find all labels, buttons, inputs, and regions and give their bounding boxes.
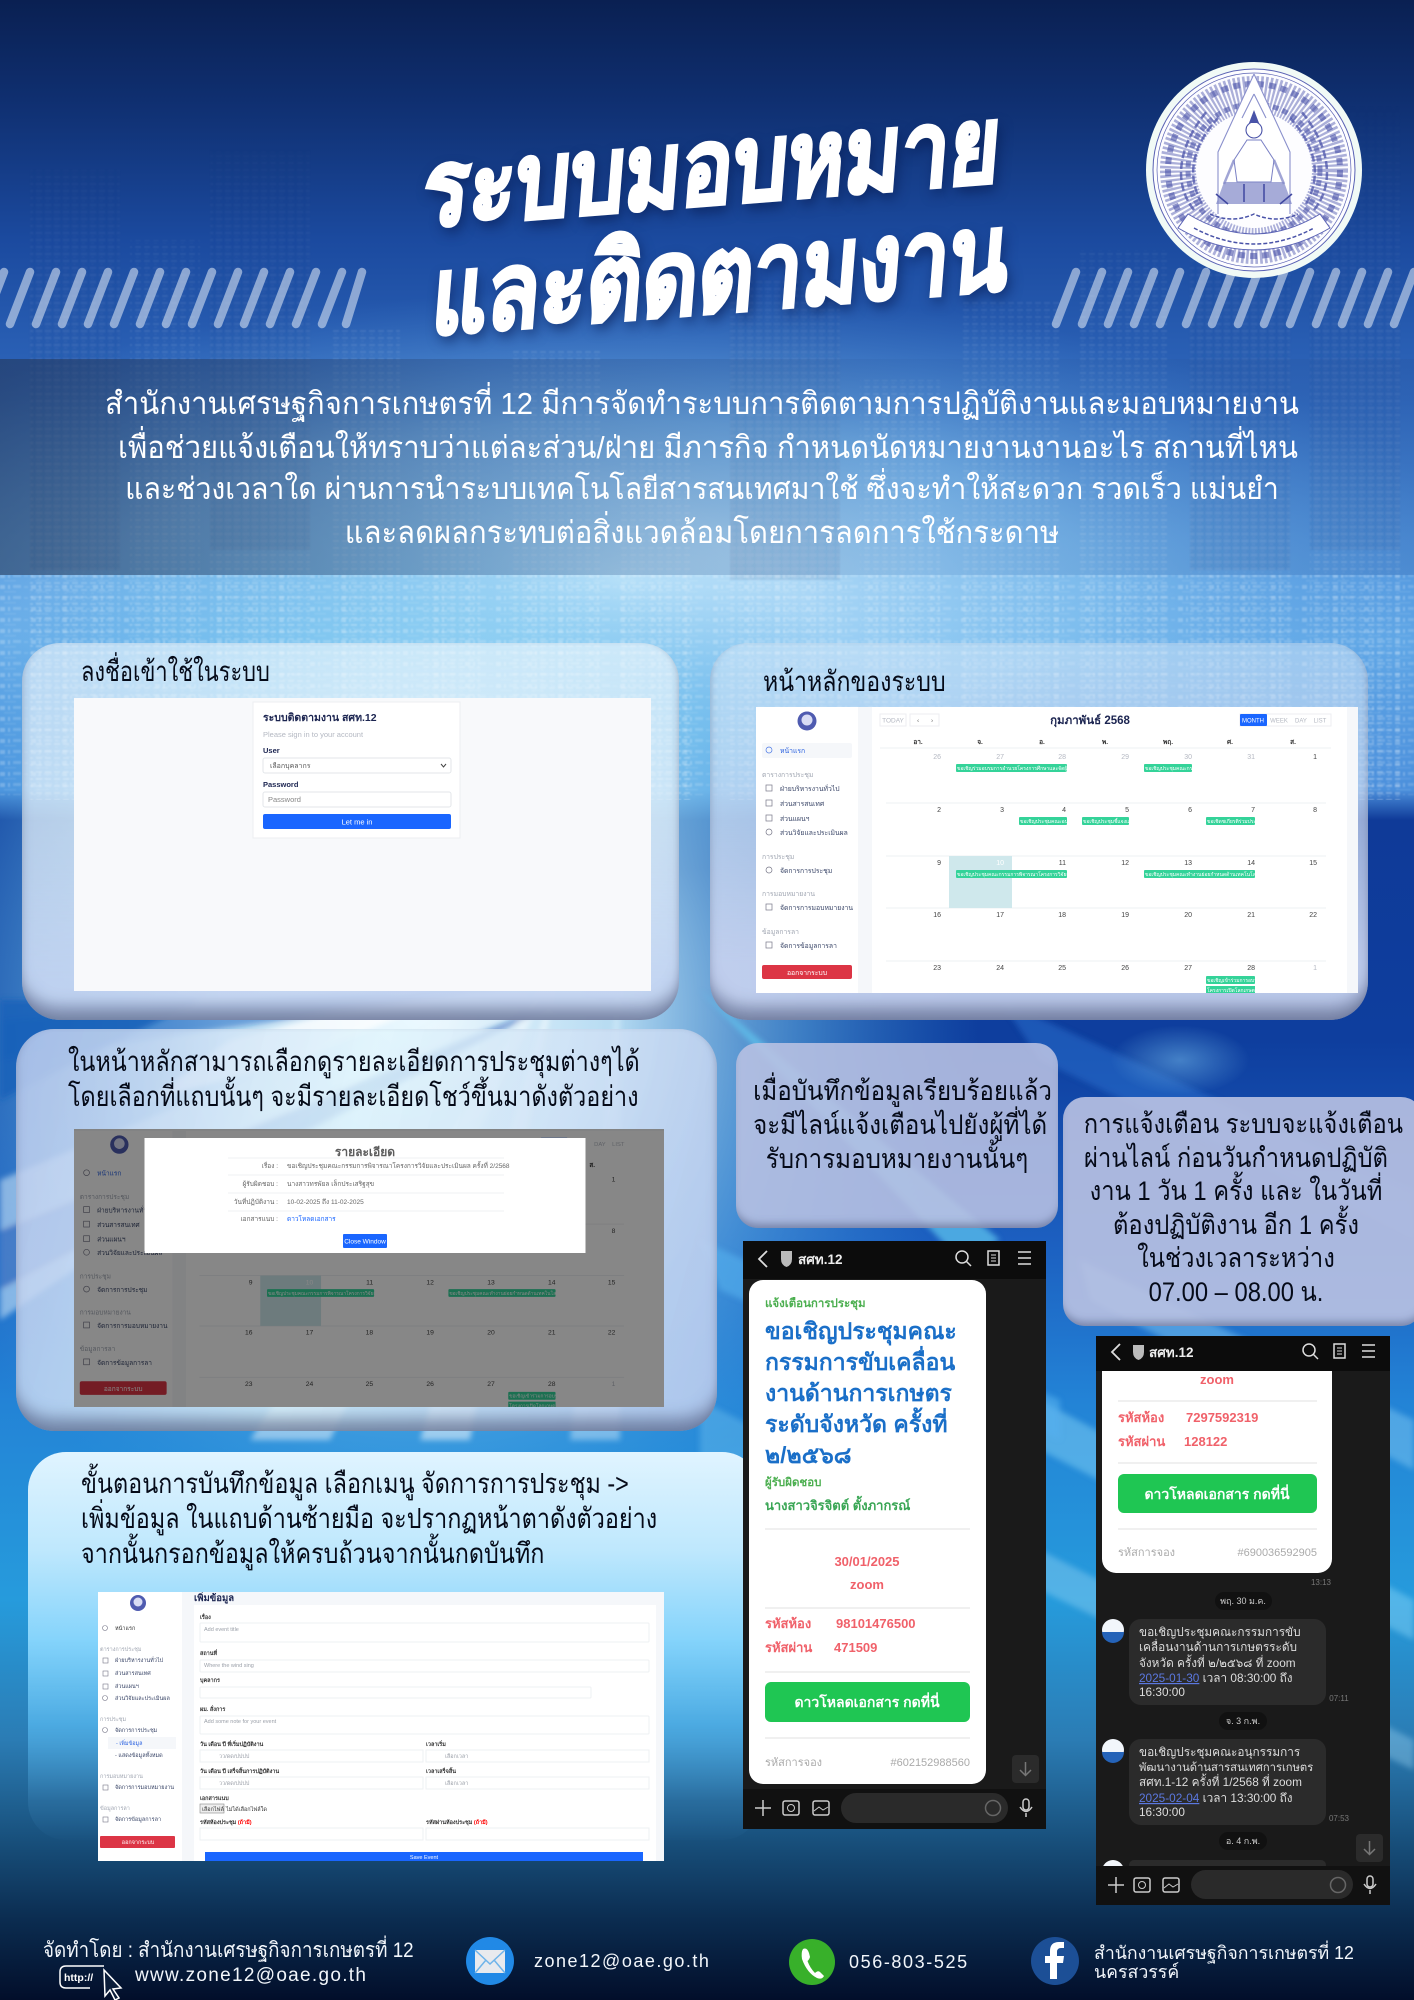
screenshot: calendar: ขอเชิญประชุมคณะอนุกร [1020,818,1074,825]
screenshot: calendar: พ. [1102,739,1108,746]
sidebar: จัดการข้อมูลการลา [780,942,837,950]
sidebar: จัดการการประชุม [115,1727,158,1734]
screenshot: details modal: LIST [612,1142,625,1148]
screenshot: details modal: หน้าแรก [97,1170,121,1178]
date pill [1219,1832,1267,1850]
day numbers: 22 [1309,912,1317,919]
message card [749,1280,986,1784]
screenshot: calendar: ขอเชิญเข้าร่วมการอบรม [1207,977,1260,984]
day numbers: 9 [937,860,941,867]
form: เพิ่มข้อมูล [194,1592,234,1605]
day numbers: 7 [1251,807,1255,814]
form: เลือกเวลา [445,1753,468,1760]
screenshot: details modal: 8 [612,1228,616,1235]
calendar header: LIST [1314,718,1327,724]
sidebar: การประชุม [762,854,794,861]
date pill [1219,1712,1267,1730]
form: บุคลากร [200,1677,220,1684]
screenshot: login page: เลือกบุคลากร [270,762,311,770]
heading: meeting details: โดยเลือกที่แถบนั้นๆ จะมีรายละเอียดโชว์ขึ้นมาดังตัวอย่าง [68,1081,639,1112]
text: reminder schedule note: งาน 1 วัน 1 ครั้ง และ ในวันที่ [1090,1176,1382,1206]
screenshot: details modal: 11 [366,1279,373,1286]
sidebar: หน้าแรก [780,747,805,755]
message card: zoom [1200,1372,1234,1387]
phone header [1096,1336,1390,1371]
screenshot: details modal: 20 [487,1330,495,1337]
form: ไม่ได้เลือกไฟล์ใด [225,1806,267,1813]
form: วัน เดือน ปี เสร็จสิ้นการปฏิบัติงาน [200,1766,279,1775]
form: รหัสห้องประชุม (ถ้ามี) [200,1818,252,1826]
screenshot: calendar: ขอเชิญร่วมอบรมการอำนวยโครงการศึกษาและจัดผู้ปฏิบัติการ [957,765,1089,772]
modal: event details: ดาวโหลดเอกสาร [287,1215,336,1223]
day numbers: 1 [1313,965,1317,972]
diagonal stripes right [1052,268,1414,328]
sidebar: จัดการการมอบหมายงาน [115,1784,174,1791]
avatar [1102,1739,1124,1763]
screenshot: details modal: ส่วนสารสนเทศ [97,1222,140,1229]
screenshot: details modal: ขอเชิญเข้าร่วมการอบรม [509,1393,560,1400]
form: วัน เดือน ปี ที่เริ่มปฏิบัติงาน [200,1740,264,1748]
message card: 98101476500 [836,1616,916,1631]
panel: sign in [22,643,679,1020]
modal: event details: เรื่อง : [262,1161,278,1170]
day numbers: 13 [1184,860,1192,867]
day numbers: 10 [996,860,1004,867]
form: เลือกเวลา [445,1780,468,1787]
text: reminder schedule note [1084,1109,1403,1306]
heading: meeting details [68,1046,640,1112]
chat bubble 1: 2025-01-30 เวลา 08:30:00 ถึง [1139,1671,1293,1685]
icon: phone [789,1939,835,1985]
icon: web address cursor: http:// [64,1972,93,1984]
date pill: จ. 3 ก.พ. [1226,1716,1260,1726]
form: สถานที่ [200,1649,218,1657]
screenshot: calendar: ขอเชิดชเกียรติร่วมประ [1207,818,1256,825]
panel: LINE notification note [736,1043,1058,1228]
message card: 471509 [834,1640,877,1655]
screenshot: details modal: 17 [306,1330,314,1337]
screenshot: login page: Let me in [342,818,372,826]
screenshot: details modal: 10 [306,1279,314,1286]
day numbers: 14 [1247,860,1255,867]
message card: 7297592319 [1186,1410,1258,1425]
message card: ระดับจังหวัด ครั้งที่ [765,1407,947,1437]
screenshot: details modal: 16 [245,1330,253,1337]
form: เรื่อง [200,1613,211,1621]
message card [1102,1371,1332,1573]
day numbers: 28 [1058,754,1066,761]
message card: รหัสห้อง [1118,1410,1164,1425]
screenshot: login page: User [263,746,280,755]
phone input bar [743,1789,1046,1829]
screenshot: calendar: ส. [1290,739,1296,746]
sidebar: ออกจากระบบ [787,970,827,977]
modal: event details: ผู้รับผิดชอบ : [242,1180,278,1188]
message card: ๒/๒๕๖๘ [765,1442,851,1468]
panel: how to save data [28,1452,760,1840]
day numbers: 23 [933,965,941,972]
day numbers: 27 [996,754,1004,761]
form: เวลาเริ่ม [426,1740,446,1748]
sidebar [100,1595,176,1848]
form [194,1590,656,1861]
intro text block [105,382,1299,550]
form: รหัสผ่านห้องประชุม (ถ้ามี) [426,1818,488,1826]
day numbers: 20 [1184,912,1192,919]
screenshot: login page [74,698,651,991]
sidebar: หน้าแรก [115,1625,135,1632]
chat bubble 2: 07:53 [1329,1814,1350,1823]
phone header: สศท.12 [798,1252,842,1267]
day numbers: 6 [1188,807,1192,814]
screenshot: details modal: จัดการข้อมูลการลา [97,1359,152,1367]
chat bubble 2: สศท.1-12 ครั้งที่ 1/2568 ที่ zoom [1139,1773,1302,1789]
screenshot: details modal: 1 [612,1381,616,1388]
form: Where the wind sing [204,1663,254,1669]
message card: ดาวโหลดเอกสาร กดที่นี่ [1144,1484,1290,1502]
message card: นางสาวจิรจิตต์ ตั้งภากรณ์ [765,1495,910,1513]
heading: how to save data [81,1464,657,1570]
message card: zoom [850,1577,884,1592]
message card: 30/01/2025 [834,1554,900,1569]
chat bubble 1: เคลื่อนงานด้านการเกษตรระดับ [1139,1639,1297,1654]
text: reminder schedule note: ต้องปฏิบัติงาน อีก 1 ครั้ง [1113,1210,1359,1240]
form: Add some note for your event [204,1719,277,1725]
modal: event details: รายละเอียด [335,1145,395,1159]
screenshot: details modal: ฝ่ายบริหารงานทั่วไป [97,1205,154,1214]
modal: event details: เอกสารแนบ : [240,1216,278,1223]
day numbers: 11 [1059,860,1066,867]
icon: email [466,1937,514,1985]
heading: main page: หน้าหลักของระบบ [763,666,946,697]
screenshot: login page: ระบบติดตามงาน สศท.12 [263,712,377,724]
sidebar [762,712,853,979]
message card: ขอเชิญประชุมคณะ [765,1318,957,1346]
screenshot: details modal: 15 [608,1279,616,1286]
chat bubble 1: ขอเชิญประชุมคณะกรรมการขับ [1139,1625,1301,1639]
screenshot: calendar: ขอเชิญประชุมชี้แจงแผน [1083,816,1136,825]
phone screenshot: LINE reminders: 13:13 [1311,1578,1332,1587]
screenshot: details modal: 1 [612,1176,616,1183]
screenshot: details modal: 25 [366,1381,373,1388]
screenshot: details modal: ส. [589,1162,595,1169]
calendar header [880,713,1331,728]
chat bubble 2: 16:30:00 [1139,1805,1185,1819]
sidebar: การมอบหมายงาน [100,1774,143,1780]
heading: how to save data: เพิ่มข้อมูล ในแถบด้านซ้ายมือ จะปรากฏหน้าตาดังตัวอย่าง [81,1503,657,1534]
screenshot: details modal: 13 [487,1279,495,1286]
phone screenshot: LINE reminders [1096,1336,1390,1905]
sidebar: ส่วนแผนฯ [115,1683,139,1690]
message card: รหัสผ่าน [1118,1434,1165,1449]
form: Add event title [204,1627,239,1633]
phone input bar [1096,1866,1390,1905]
decorative band behind the intro text [0,359,1414,575]
message card: งานด้านการเกษตร [765,1380,953,1406]
chat bubble 1 [1129,1619,1349,1705]
day numbers: 25 [1058,965,1066,972]
date pill: อ. 4 ก.พ. [1226,1836,1260,1846]
screenshot: details modal: 27 [487,1381,495,1388]
day numbers: 26 [1121,965,1129,972]
screenshot: login page: Password [263,780,299,789]
screenshot: calendar: จ. [977,739,983,746]
calendar header: WEEK [1270,718,1288,724]
message card: รหัสผ่าน [765,1640,812,1655]
events [956,764,1255,993]
footer: producer [43,1936,414,2000]
screenshot: details modal: การมอบหมายงาน [80,1309,131,1316]
calendar header: DAY [1295,718,1307,724]
sidebar: ส่วนแผนฯ [780,816,810,823]
sidebar: ตารางการประชุม [762,772,813,779]
diagonal stripes left [0,268,366,328]
sidebar: - เพิ่มข้อมูล [116,1739,143,1747]
footer: facebook: สำนักงานเศรษฐกิจการเกษตรที่ 12 [1094,1943,1354,1963]
day numbers: 19 [1121,912,1129,919]
message card: กรรมการขับเคลื่อน [765,1345,955,1375]
screenshot: details modal: ขอเชิญประชุมคณะทำงานย่อยกำหนดด้านเทคโนโลยีสาร [449,1290,568,1297]
screenshot: add data form [98,1592,664,1861]
chat bubble 2 [1129,1739,1350,1825]
footer: facebook: นครสวรรค์ [1094,1962,1179,1982]
intro text block: เพื่อช่วยแจ้งเตือนให้ทราบว่าแต่ละส่วน/ฝ่าย มีภารกิจ กำหนดนัดหมายงานงานอะไร สถานที่ไหน [118,430,1298,465]
footer: facebook [1031,1937,1354,1985]
screenshot: calendar [756,707,1358,993]
footer: producer: www.zone12@oae.go.th [135,1965,367,1986]
footer: phone [789,1939,969,1985]
form: วว/ดด/ปปปป [219,1780,250,1787]
screenshot: details modal: 22 [608,1330,616,1337]
title: และติดตามงาน [428,193,1013,358]
day numbers: 16 [933,912,941,919]
chat bubble 1: 16:30:00 [1139,1685,1185,1699]
sidebar: ข้อมูลการลา [762,928,799,936]
modal: event details [144,1138,586,1253]
day numbers: 28 [1247,965,1255,972]
day numbers: 31 [1247,754,1255,761]
screenshot: calendar: ขอเชิญประชุมคณะกรรม [1145,765,1198,772]
logo seal: Office of Agricultural Economics [1146,62,1362,278]
screenshot: calendar: ศ. [1227,739,1233,746]
avatar [1102,1619,1124,1643]
heading: sign in: ลงชื่อเข้าใช้ในระบบ [81,656,270,687]
screenshot: details modal: ตารางการประชุม [80,1194,129,1201]
panel: main page [710,643,1368,1020]
sidebar: ออกจากระบบ [122,1840,155,1846]
screenshot: calendar: อ. [1039,739,1045,746]
screenshot: details modal: ข้อมูลการลา [80,1345,116,1353]
text: reminder schedule note: การแจ้งเตือน ระบบจะแจ้งเตือน [1084,1109,1403,1139]
sidebar: ส่วนสารสนเทศ [780,801,825,808]
screenshot: details modal: 19 [426,1330,434,1337]
form: เอกสารแนบ [200,1795,229,1802]
sidebar: ข้อมูลการลา [100,1805,130,1812]
chat bubble 2: 2025-02-04 เวลา 13:30:00 ถึง [1139,1791,1293,1805]
day numbers: 21 [1247,912,1255,919]
footer: phone: 056-803-525 [849,1952,969,1972]
calendar header: TODAY [882,718,905,724]
day numbers: 8 [1313,807,1317,814]
sidebar: ตารางการประชุม [100,1646,142,1653]
date pill: พฤ. 30 ม.ค. [1220,1596,1266,1606]
screenshot: calendar: ขอเชิญประชุมคณะกรรมการพิจารณาโครงการวิจัยและประ [957,871,1084,878]
calendar header: › [931,718,933,724]
sidebar: การมอบหมายงาน [762,891,815,898]
title: ระบบมอบหมาย [419,85,1005,250]
calendar header: MONTH [1242,718,1264,724]
title [419,85,1016,358]
screenshot: calendar: พฤ. [1163,739,1173,746]
message card: รหัสการจอง [765,1757,822,1769]
screenshot: login page: Please sign in to your account [263,730,364,739]
day numbers: 29 [1121,754,1129,761]
form: เวลาเสร็จสิ้น [426,1766,456,1775]
day numbers: 27 [1184,965,1192,972]
text: reminder schedule note: ในช่วงเวลาระหว่าง [1137,1243,1335,1273]
screenshot: details modal: การประชุม [80,1273,111,1280]
intro text block: สำนักงานเศรษฐกิจการเกษตรที่ 12 มีการจัดทำระบบการติดตามการปฏิบัติงานและมอบหมายงาน [105,386,1299,421]
sidebar: จัดการการมอบหมายงาน [780,904,853,912]
day numbers: 1 [1313,754,1317,761]
footer: email [466,1937,710,1985]
footer: producer: จัดทำโดย : สำนักงานเศรษฐกิจการเกษตรที่ 12 [43,1939,414,1962]
calendar header: ‹ [917,718,919,724]
screenshot: details modal: ส่วนวิจัยและประเมินผล [97,1249,162,1257]
screenshot: details modal: 9 [249,1279,253,1286]
sidebar: - แสดงข้อมูลทั้งหมด [115,1751,163,1759]
chat bubble 2: พัฒนางานด้านสารสนเทศการเกษตร [1139,1761,1313,1774]
screenshot: details modal: 23 [245,1381,253,1388]
screenshot: details modal: ส่วนแผนฯ [97,1237,126,1244]
message card: รหัสห้อง [765,1616,811,1631]
screenshot: calendar: อา. [913,739,923,746]
screenshot: login page: Password [268,795,301,804]
phone header: สศท.12 [1149,1345,1193,1360]
screenshot: details modal: 18 [366,1330,373,1337]
screenshot: details modal: จัดการการมอบหมายงาน [97,1322,168,1330]
day numbers: 2 [937,807,941,814]
heading: how to save data: จากนั้นกรอกข้อมูลให้ครบถ้วนจากนั้นกดบันทึก [81,1538,544,1569]
panel: reminder schedule note [1063,1097,1414,1326]
form: วว/ดด/ปปปป [219,1753,250,1760]
modal: event details: วันที่ปฏิบัติงาน : [234,1197,278,1206]
day numbers [933,754,1317,972]
text: LINE notification note: เมื่อบันทึกข้อมูลเรียบร้อยแล้ว [753,1076,1052,1106]
text: reminder schedule note: 07.00 – 08.00 น. [1149,1276,1323,1306]
day numbers: 12 [1121,860,1129,867]
sidebar: ส่วนสารสนเทศ [115,1670,151,1677]
screenshot: details modal: 21 [548,1330,556,1337]
message card: แจ้งเตือนการประชุม [765,1297,866,1311]
chat bubble 2: ขอเชิญประชุมคณะอนุกรรมการ [1139,1745,1300,1759]
message card: #602152988560 [890,1757,970,1769]
screenshot: calendar: ขอเชิญประชุมคณะทำงานย่อยกำหนดด้านเทคโนโลยีสาร [1145,871,1268,878]
message card: 128122 [1184,1434,1227,1449]
text: LINE notification note: รับการมอบหมายงานนั้นๆ [766,1144,1028,1174]
day numbers: 18 [1058,912,1066,919]
screenshot: details modal: 24 [306,1381,314,1388]
heading: meeting details: ในหน้าหลักสามารถเลือกดูรายละเอียดการประชุมต่างๆได้ [68,1046,640,1077]
sidebar: ส่วนวิจัยและประเมินผล [115,1695,170,1702]
modal: event details: 10-02-2025 ถึง 11-02-2025 [287,1198,364,1206]
sidebar: ฝ่ายบริหารงานทั่วไป [115,1656,164,1664]
modal: event details: ขอเชิญประชุมคณะกรรมการพิจารณาโครงการวิจัยและประเมินผล ครั้งที่ 2/2568 [287,1161,510,1170]
form: ผม. สั่งการ [200,1705,225,1713]
screenshot: details modal: ออกจากระบบ [104,1386,143,1393]
icon: web address cursor [59,1965,122,2000]
sidebar: จัดการข้อมูลการลา [115,1816,161,1823]
screenshot: details modal: 28 [548,1381,556,1388]
day numbers: 17 [996,912,1004,919]
skyline towers [30,246,1400,800]
modal: event details: Close Window [344,1238,386,1246]
screenshot: details modal: 12 [426,1279,434,1286]
chat bubble 1: จังหวัด ครั้งที่ ๒/๒๕๖๘ ที่ zoom [1139,1654,1296,1670]
day numbers: 5 [1125,807,1129,814]
message card: รหัสการจอง [1118,1547,1175,1559]
footer: email: zone12@oae.go.th [534,1951,710,1971]
text: LINE notification note [753,1072,1052,1174]
heading: how to save data: ขั้นตอนการบันทึกข้อมูล เลือกเมนู จัดการการประชุม -> [81,1468,629,1499]
intro text block: และช่วงเวลาใด ผ่านการนำระบบเทคโนโลยีสารสนเทศมาใช้ ซึ่งจะทำให้สะดวก รวดเร็ว แม่นยำ [125,473,1279,506]
screenshot: details modal: DAY [594,1142,606,1148]
sidebar: ส่วนวิจัยและประเมินผล [780,829,848,837]
phone screenshot: LINE meeting notice [743,1241,1046,1829]
calendar header: กุมภาพันธ์ 2568 [1050,713,1131,728]
screenshot: details modal: จัดการการประชุม [97,1286,147,1294]
day numbers: 24 [996,965,1004,972]
intro text block: และลดผลกระทบต่อสิ่งแวดล้อมโดยการลดการใช้กระดาษ [345,515,1059,550]
date pill [1215,1592,1272,1610]
message card: ผู้รับผิดชอบ [765,1476,821,1490]
day numbers: 4 [1062,807,1066,814]
sidebar: ฝ่ายบริหารงานทั่วไป [780,784,840,793]
day numbers: 30 [1184,754,1192,761]
screenshot: details modal: 14 [548,1279,556,1286]
chat bubble 1: 07:11 [1329,1694,1349,1703]
screenshot: details modal: 26 [426,1381,434,1388]
sidebar: การประชุม [100,1716,127,1723]
form: เลือกไฟล์ [202,1806,224,1813]
modal: event details: นางสาวทรพัยล เล็กประเสริฐสุข [287,1179,374,1188]
phone header [743,1241,1046,1279]
message card: ดาวโหลดเอกสาร กดที่นี่ [794,1692,940,1710]
text: LINE notification note: จะมีไลน์แจ้งเตือนไปยังผู้ที่ได้ [753,1110,1047,1140]
message card: #690036592905 [1237,1547,1317,1559]
screenshot: details modal [74,1129,664,1407]
sidebar: จัดการการประชุม [780,867,832,875]
screenshot: details modal: ขอเชิญประชุมคณะกรรมการพิจารณาโครงการวิจัยและประ [268,1290,391,1297]
light rays [0,960,1414,1770]
text: reminder schedule note: ผ่านไลน์ ก่อนวันกำหนดปฏิบัติ [1084,1142,1388,1172]
form: Save Event [410,1855,439,1861]
panel: meeting details [16,1029,717,1431]
day numbers: 15 [1309,860,1317,867]
day numbers: 3 [1000,807,1004,814]
day numbers: 26 [933,754,941,761]
icon: facebook [1031,1937,1079,1985]
